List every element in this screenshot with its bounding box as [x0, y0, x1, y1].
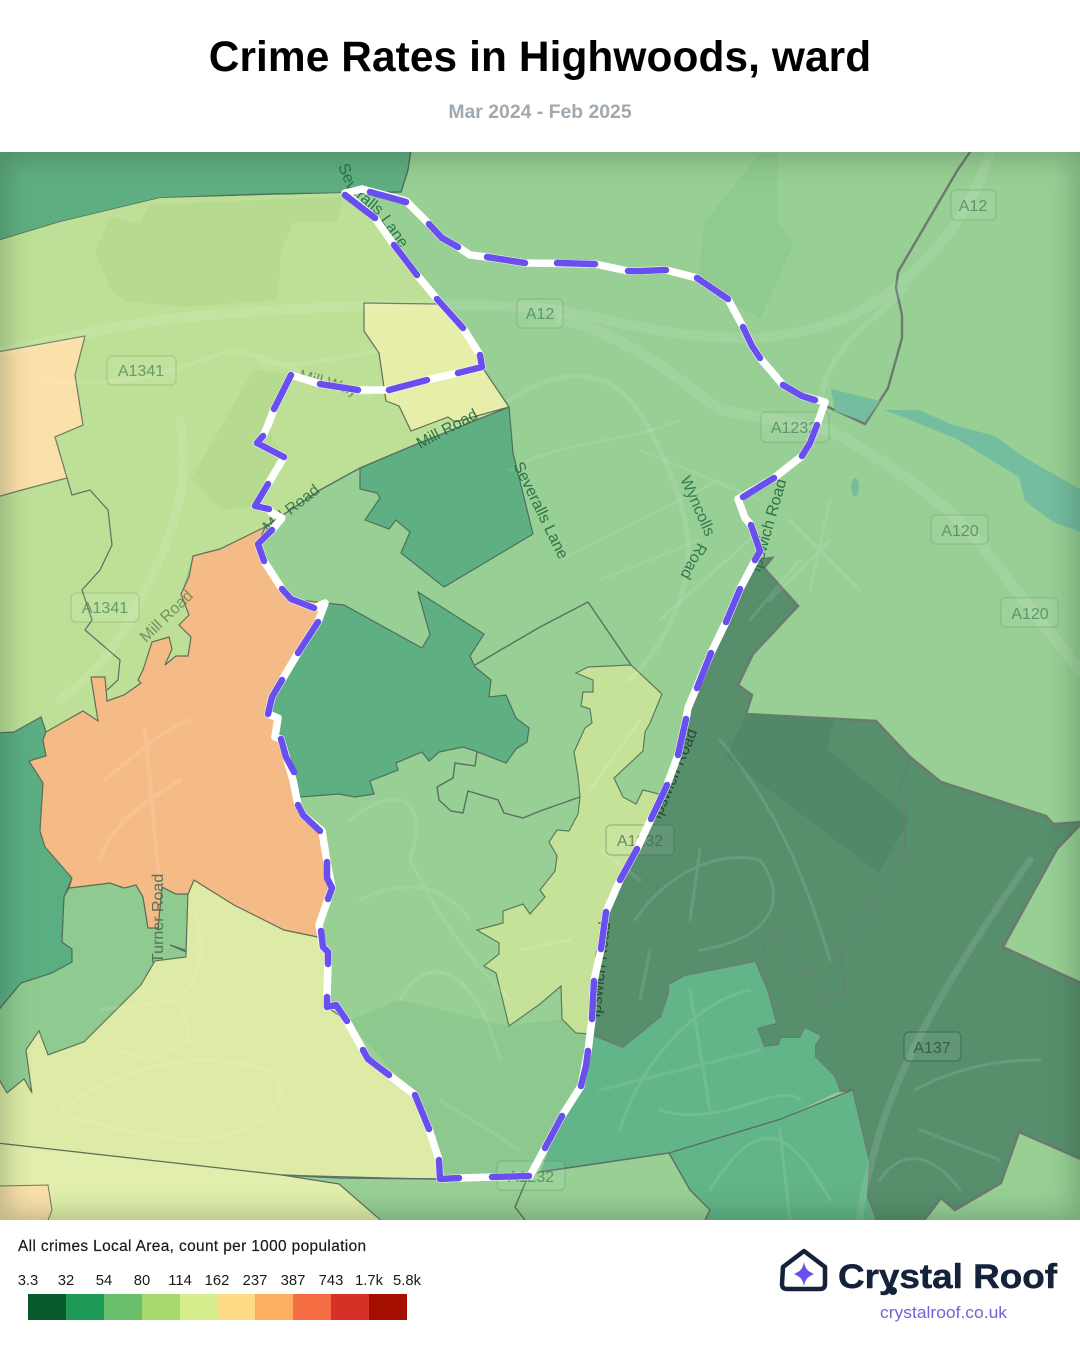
legend swatches [28, 1294, 407, 1320]
badge: A137 [904, 1032, 961, 1061]
legend title: All crimes Local Area, count per 1000 population [18, 1238, 366, 1255]
zone: southern pale yellow [0, 880, 440, 1179]
badge: A137: A137 [913, 1040, 951, 1057]
road name: Severalls Lane north: Severalls Lane [339, 164, 406, 247]
legend tick labels: 743 [319, 1273, 343, 1289]
zone: north-west pale orange [0, 336, 85, 497]
legend tick labels: 54 [96, 1273, 112, 1289]
road name: Mill Road north-east: Mill Road [414, 406, 481, 453]
icon: house outline [782, 1251, 825, 1289]
badge: A1232 east [761, 412, 829, 442]
shaded field north-east [698, 153, 793, 319]
water: pond [851, 478, 859, 496]
legend tick labels: 1.7k [355, 1273, 384, 1289]
badge: A1341 lower [71, 593, 139, 622]
road name: Mill Way: Mill Way [297, 367, 359, 399]
subtitle: date range: Mar 2024 - Feb 2025 [448, 101, 632, 123]
badge: A120 upper: A120 [941, 523, 979, 540]
zone: far south-west pale orange [0, 1185, 52, 1223]
badge: A1232 east: A1232 [771, 420, 817, 437]
boundary lines [67, 152, 970, 1220]
legend: colour scale [18, 1273, 422, 1320]
badge: A1341 upper: A1341 [118, 363, 164, 380]
title: Crime Rates in Highwoods, ward [209, 33, 871, 80]
zone: high crime orange [29, 527, 332, 937]
road name: Mill Road west: Mill Road [137, 587, 197, 646]
choropleth map [0, 152, 1080, 1220]
legend tick labels: 32 [58, 1273, 74, 1289]
shaded field central south [347, 1000, 590, 1179]
badge: A120 lower [1001, 598, 1058, 627]
road name: Severalls Lane centre: Severalls Lane [509, 459, 571, 562]
road name: Ipswich Road centre: Ipswich Road [648, 727, 701, 822]
road name: Wyncolls Road: Wyncolls [676, 474, 718, 539]
water: river [831, 389, 1080, 533]
zone: central dark green south [268, 592, 529, 797]
legend tick labels [18, 1273, 422, 1289]
road name: Ipswich Road north: Ipswich Road [748, 477, 790, 574]
zone: south-east darkest green [593, 558, 1080, 1223]
road name: Mill Road centre: Mill Road [260, 482, 323, 536]
legend tick labels: 387 [281, 1273, 305, 1289]
zone: inner yellow green corridor [477, 665, 662, 1034]
ward boundary: white casing [255, 189, 825, 1179]
legend tick labels: 3.3 [18, 1273, 38, 1289]
legend tick labels: 162 [205, 1273, 229, 1289]
badge: A12 centre [517, 299, 563, 328]
shaded fields in north-west zone [95, 196, 345, 510]
icon: purple sparkle [794, 1262, 814, 1286]
road name: Ipswich Road south: Ipswich Road [587, 921, 614, 1018]
zone: central dark green north [360, 407, 533, 587]
zone: north-west yellow green [0, 193, 509, 735]
wordmark: Crystal Roof [838, 1258, 1058, 1296]
zone: lower medium green [669, 1090, 877, 1223]
ward boundary: purple dashes [255, 192, 817, 1179]
icon: keyhole on y descender [889, 1287, 897, 1295]
road network [0, 152, 1080, 1220]
base area: light green zones [0, 152, 1080, 1220]
zone: northern dark green strip [0, 149, 411, 241]
badge: A120 upper [931, 515, 988, 544]
legend tick labels: 80 [134, 1273, 150, 1289]
zone: far south pale yellow [0, 1143, 384, 1223]
badge: A120 lower: A120 [1011, 606, 1049, 623]
badge: A1232 centre: A1232 [617, 833, 663, 850]
road number badges [71, 190, 1058, 1190]
badge: A1341 lower: A1341 [82, 600, 128, 617]
legend tick labels: 114 [168, 1273, 192, 1289]
zone: south-west light green [0, 883, 191, 1093]
legend tick labels: 5.8k [393, 1273, 422, 1289]
website link: crystalroof.co.uk [880, 1304, 1008, 1322]
badge: A1232 south [497, 1161, 565, 1190]
road name: Wyncolls Road lower part: Road [677, 540, 709, 582]
badge: A12 north-east: A12 [959, 198, 987, 215]
legend tick labels: 237 [243, 1273, 267, 1289]
map edge vignette [0, 152, 1080, 1220]
badge: A1341 upper [107, 356, 176, 385]
shaded field inside dark zone [726, 714, 910, 873]
badge: A1232 south: A1232 [508, 1169, 554, 1186]
zone: Highwoods east medium green [540, 962, 840, 1172]
road names [137, 164, 790, 1018]
zone: pale yellow pocket by Mill Road [364, 303, 509, 431]
road name: Turner Road: Turner Road [150, 874, 167, 963]
badge: A1232 centre [606, 825, 674, 855]
zone: western dark green [0, 717, 72, 1012]
badge: A12 north-east [951, 190, 996, 220]
badge: A12 centre: A12 [526, 306, 554, 323]
logo: Crystal Roof [780, 1248, 1058, 1322]
